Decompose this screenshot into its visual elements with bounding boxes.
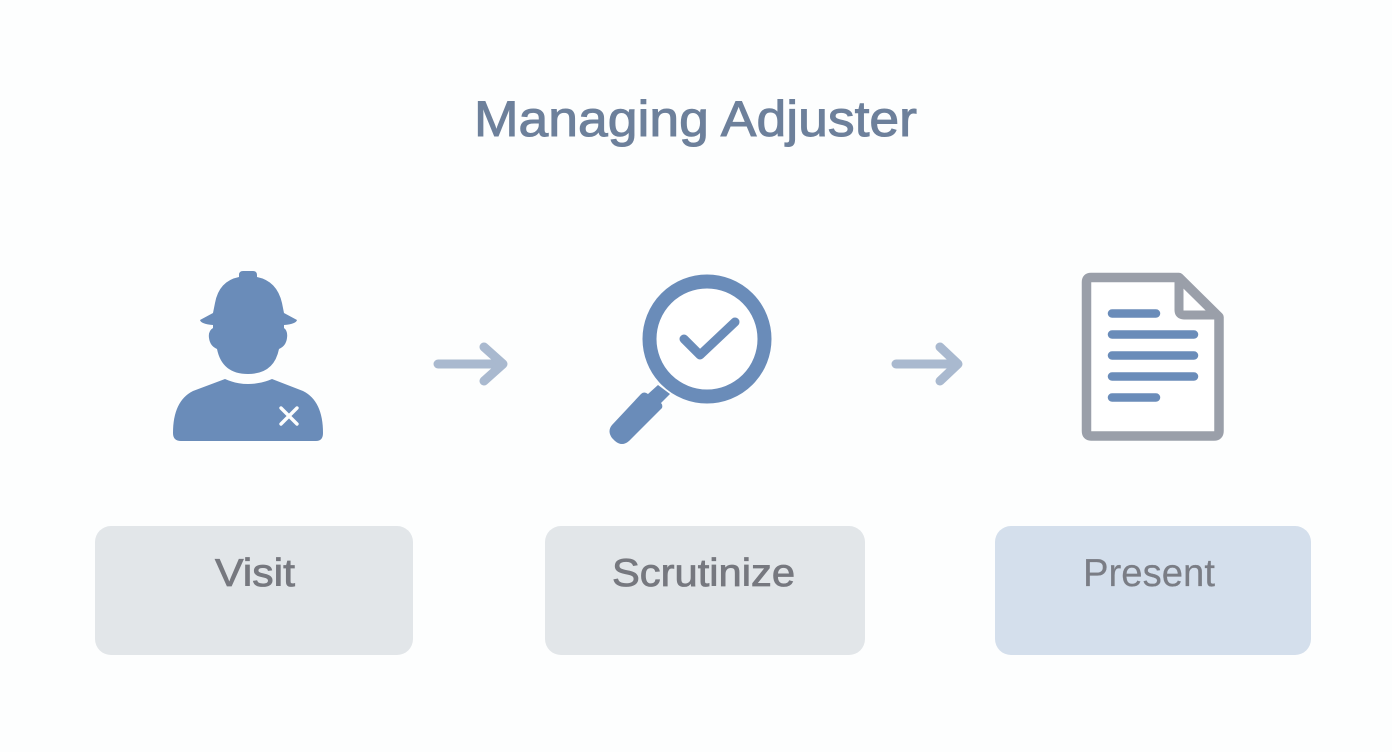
icon: magnifying glass with check [610,282,764,444]
label: scrutinize: Scrutinize [612,552,795,595]
panel: present [995,526,1311,655]
icon: adjuster with hard hat [173,271,323,441]
panel: visit [95,526,413,655]
icon: report document [1086,278,1219,436]
arrow: scrutinize to present [896,347,958,381]
title: Managing Adjuster [474,91,917,147]
panel: scrutinize [545,526,865,655]
label: visit: Visit [215,552,295,595]
label: present: Present [1083,552,1215,595]
arrow: visit to scrutinize [438,347,503,381]
